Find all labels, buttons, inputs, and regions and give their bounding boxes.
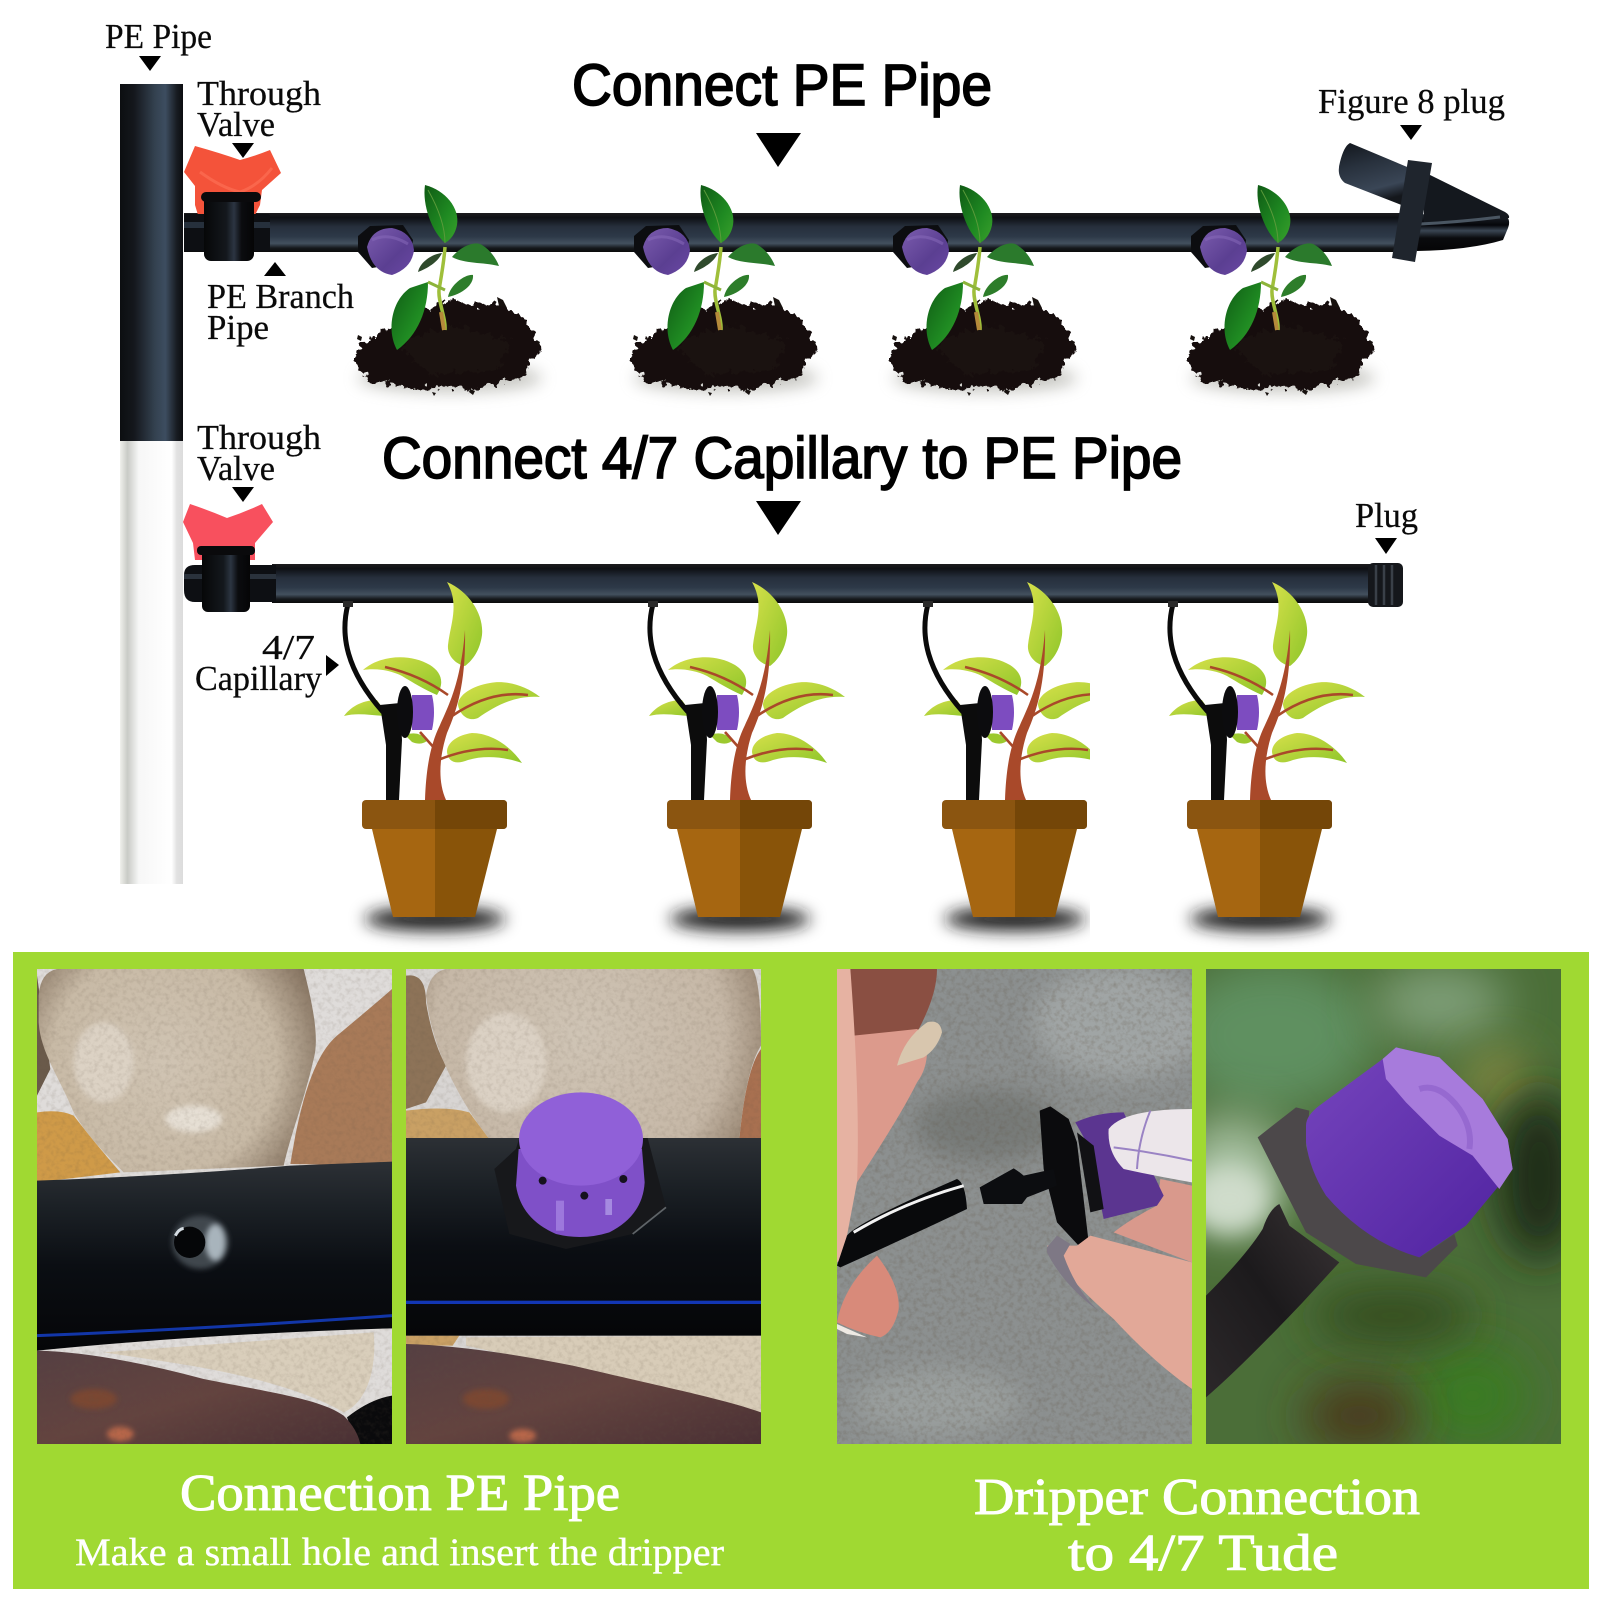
caption: Connection PE Pipe: Make a small hole and insert the dripper: [75, 1531, 724, 1574]
caption: Dripper Connection to 4/7 Tude: Dripper Connection: [974, 1469, 1420, 1526]
icon: upper through valve: [184, 146, 281, 261]
photo: dripper close-up on green background: [1206, 969, 1561, 1444]
icon: upper figure 8 plug: [1339, 143, 1509, 262]
photo: hands connecting tube to dripper: [837, 966, 1207, 1444]
caption: Dripper Connection to 4/7 Tude: to 4/7 Tude: [1068, 1525, 1338, 1582]
pipe: upper PE branch pipe: [184, 213, 1410, 252]
label: PE Branch Pipe: PE Branch: [207, 277, 354, 316]
potted plant 1: [343, 582, 540, 931]
plant 2 with soil: [630, 185, 818, 396]
plant 4 with soil: [1187, 185, 1375, 396]
photo: dripper inserted in pipe: [406, 969, 761, 1444]
label: 4/7 Capillary: Capillary: [195, 659, 322, 698]
pipe: main vertical PE pipe: [120, 84, 183, 884]
caption: Connection PE Pipe: [75, 1465, 724, 1574]
heading: Connect PE Pipe: Connect PE Pipe: [572, 53, 992, 118]
row: upper plants with drippers: [354, 185, 1375, 396]
label: Figure 8 plug: Figure 8 plug: [1318, 82, 1505, 121]
plant 1 with soil: [354, 185, 542, 396]
label: Through Valve lower: Through: [197, 418, 322, 457]
label: Plug: [1355, 496, 1418, 554]
label: PE Branch Pipe: Pipe: [207, 308, 269, 347]
label: Through Valve lower: Valve: [197, 449, 275, 488]
label: PE Pipe: PE Pipe: [105, 17, 212, 56]
label: 4/7 Capillary: 4/7: [262, 628, 315, 667]
plant 3 with soil: [889, 185, 1077, 396]
caption: Dripper Connection to 4/7 Tude: [974, 1469, 1420, 1582]
caption: Connection PE Pipe: Connection PE Pipe: [180, 1465, 620, 1522]
label: Plug: Plug: [1355, 496, 1418, 535]
row: lower potted plants with drippers: [343, 582, 1365, 931]
label: Through Valve top: [197, 74, 322, 158]
potted plant 4: [1168, 582, 1365, 931]
heading: Connect PE Pipe: [572, 53, 992, 167]
label: Through Valve lower: [197, 418, 322, 502]
panel: green instructions panel: [13, 952, 1589, 1589]
icon: lower through valve: [183, 504, 276, 612]
label: Through Valve top: Through: [197, 74, 322, 113]
icon: lower end plug: [1368, 563, 1403, 607]
pipe: lower PE branch pipe: [272, 564, 1370, 603]
label: PE Pipe: [105, 17, 212, 71]
label: 4/7 Capillary: [195, 628, 339, 698]
heading: Connect 4/7 Capillary to PE Pipe: [382, 426, 1182, 535]
potted plant 3: [922, 582, 1090, 945]
photo: pipe with punched hole: [37, 969, 392, 1444]
heading: Connect 4/7 Capillary to PE Pipe: Connect 4/7 Capillary to PE Pipe: [382, 426, 1182, 491]
label: PE Branch Pipe: [207, 262, 354, 347]
potted plant 2: [648, 582, 845, 931]
label: Through Valve top: Valve: [197, 105, 275, 144]
label: Figure 8 plug: [1318, 82, 1505, 140]
